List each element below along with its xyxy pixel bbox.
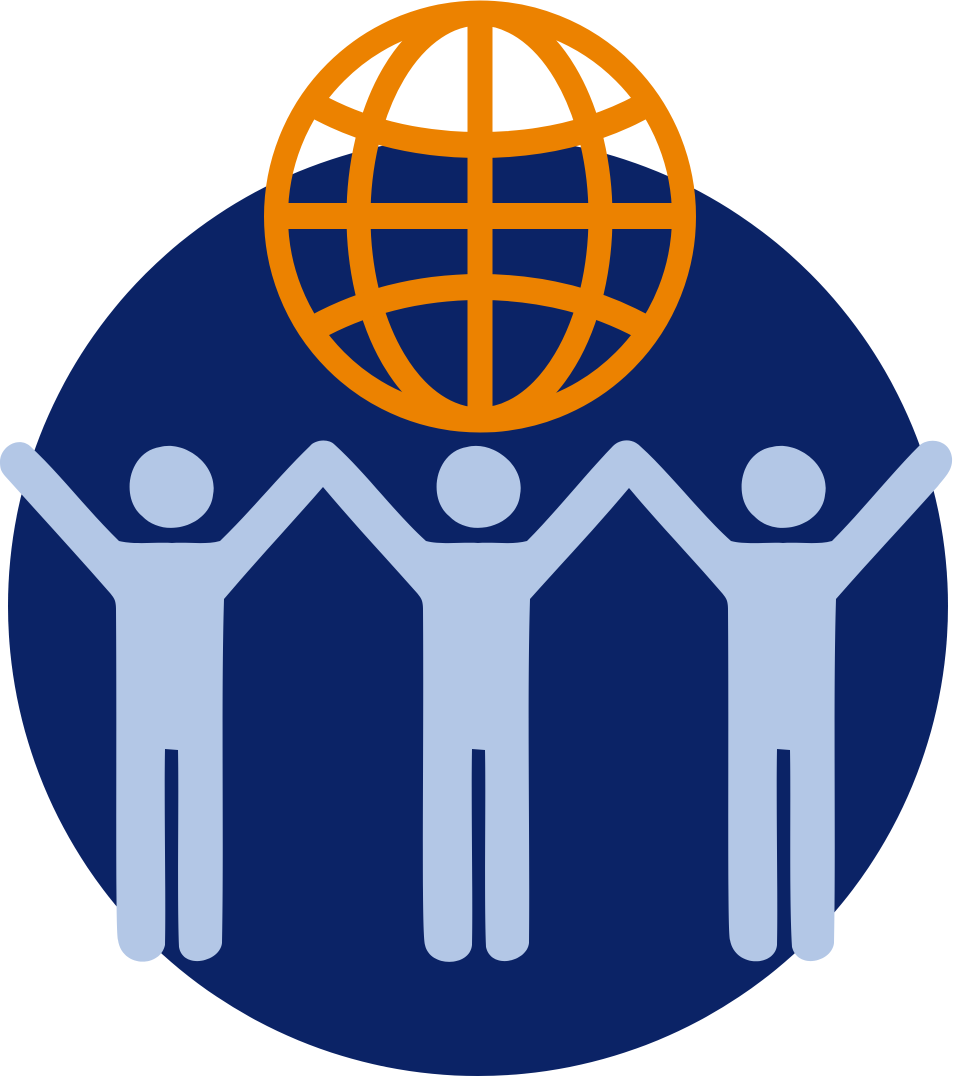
linked bodies of the three figures [0,440,952,962]
globe meridian ellipse [358,14,600,420]
head: middle figure [437,446,521,528]
head: left figure [130,446,214,528]
globe lower latitude [306,287,654,333]
people: three figures holding hands [0,440,952,962]
globe upper latitude [306,100,654,145]
head: right figure [742,446,826,528]
globe outer ring [276,12,684,420]
globe equator [270,203,690,229]
globe central meridian [468,6,492,427]
icon: orange globe [270,6,690,427]
